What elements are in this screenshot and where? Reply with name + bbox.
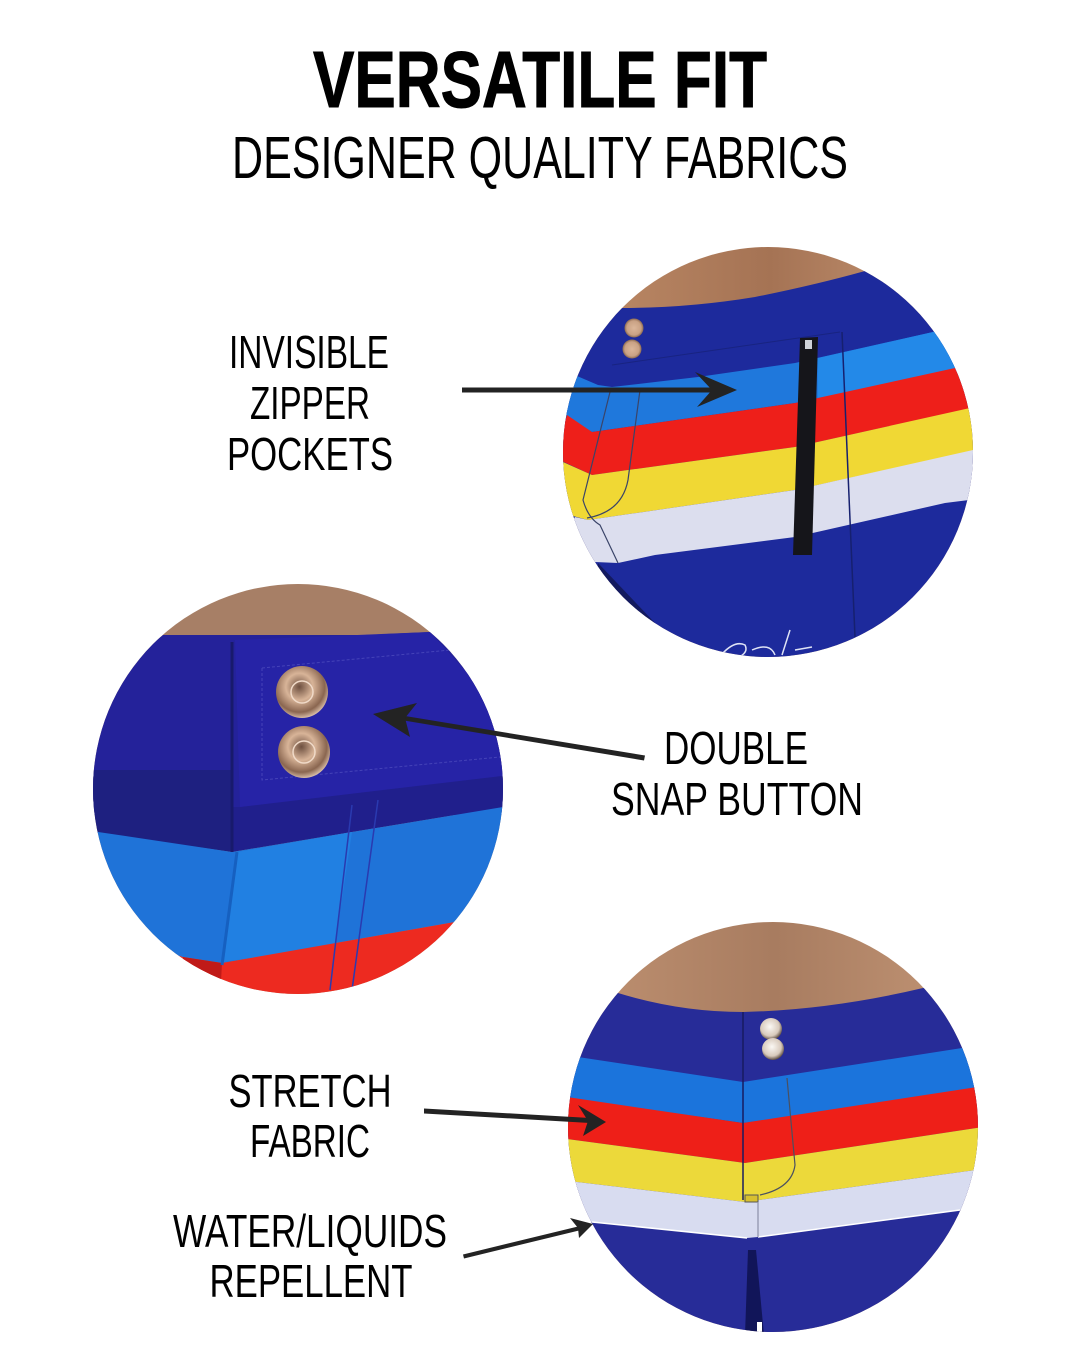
label: water/liquids repellent: WATER/LIQUIDS [173, 1205, 447, 1257]
label: invisible zipper pockets [227, 326, 393, 480]
icon: snap buttons [622, 318, 644, 358]
panel: zipper pocket detail photo [550, 245, 990, 665]
icon: silver snap buttons [760, 1018, 784, 1060]
arrow: water repellent [463, 1218, 593, 1258]
arrow: stretch fabric [424, 1105, 606, 1136]
label: stretch fabric [228, 1065, 392, 1167]
logo script [723, 630, 812, 656]
arrow: zipper pockets [462, 372, 737, 407]
label: invisible zipper pockets: ZIPPER [250, 377, 370, 429]
label: stretch fabric: STRETCH [228, 1065, 392, 1117]
label: double snap button: DOUBLE [664, 722, 808, 774]
label: double snap button [611, 722, 863, 825]
label: stretch fabric: FABRIC [250, 1115, 370, 1167]
label: invisible zipper pockets: INVISIBLE [229, 326, 389, 378]
title: VERSATILE FIT [313, 35, 767, 124]
label: invisible zipper pockets: POCKETS [227, 428, 393, 480]
icon: zipper [793, 337, 818, 555]
panel: snap button detail photo [80, 580, 515, 1000]
subtitle: DESIGNER QUALITY FABRICS [232, 124, 848, 191]
label: water/liquids repellent: REPELLENT [210, 1255, 412, 1307]
icon: gold snap buttons [276, 666, 330, 778]
label: double snap button: SNAP BUTTON [611, 773, 863, 825]
panel: stretch fabric detail photo [560, 920, 990, 1340]
label: water/liquids repellent [173, 1205, 447, 1307]
arrow: snap button [373, 703, 645, 760]
